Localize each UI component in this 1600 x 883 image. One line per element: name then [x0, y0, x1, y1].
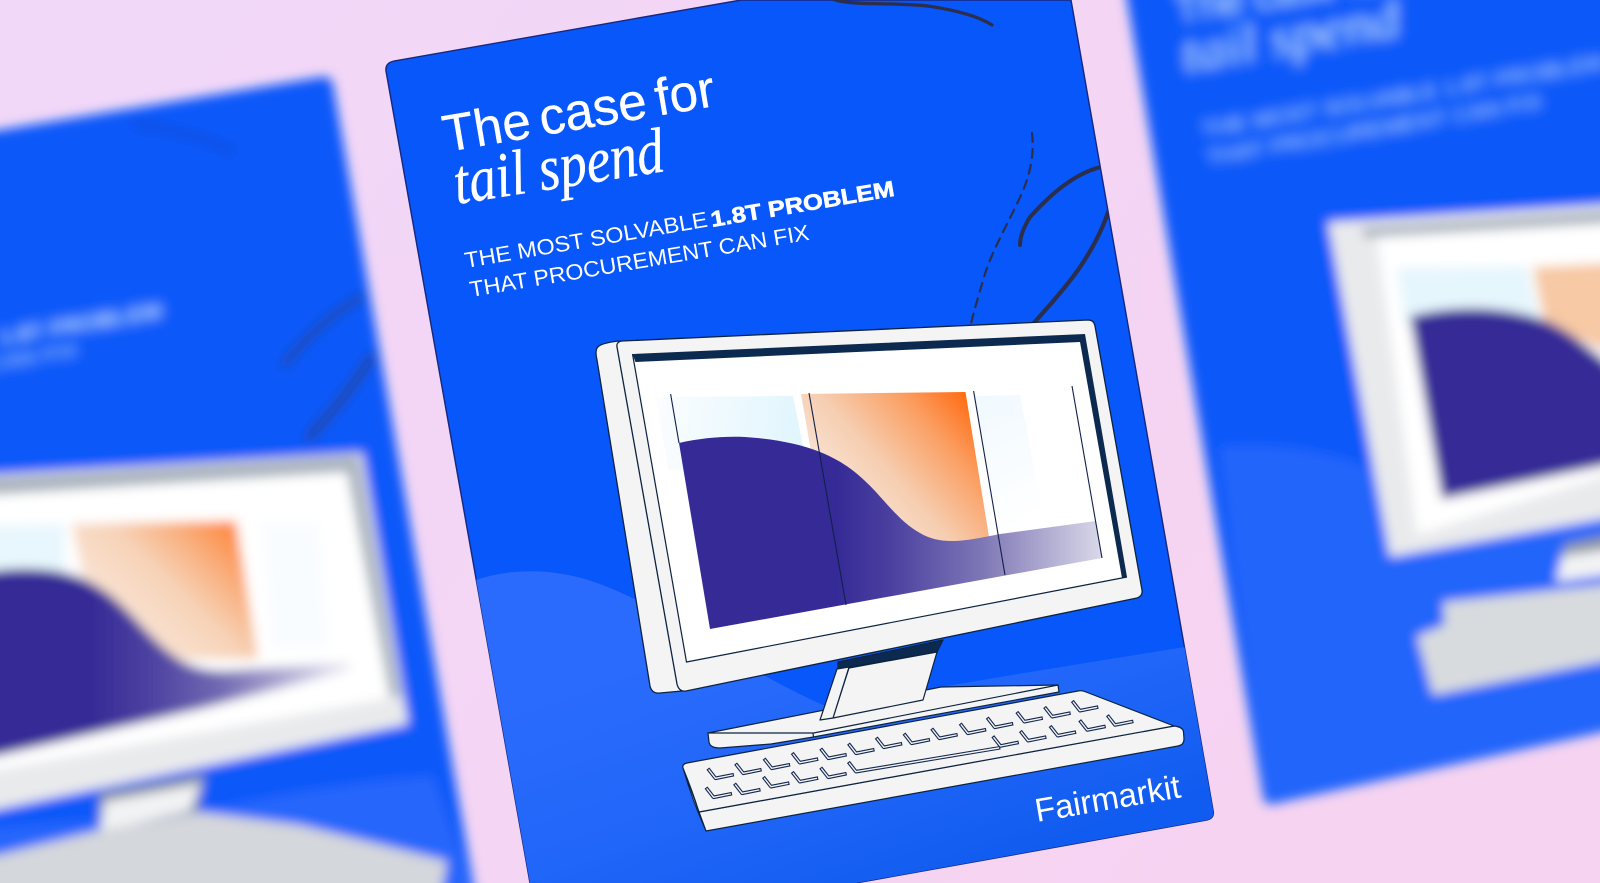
subtitle — [463, 176, 896, 302]
poster background — [386, 0, 1213, 883]
panel: blurred right poster: THE MOST SOLVABLE 1.8T PROBLEM — [1200, 52, 1600, 141]
subtitle: 1.8T PROBLEM — [709, 176, 896, 232]
decorative sketch lines — [833, 0, 1112, 324]
subtitle: THAT PROCUREMENT CAN FIX — [468, 220, 811, 302]
panel: blurred left poster — [0, 77, 476, 883]
chart — [656, 386, 1102, 629]
monitor — [596, 320, 1142, 693]
monitor base — [708, 685, 1059, 748]
monitor stand — [820, 640, 943, 720]
panel: main poster — [386, 0, 1230, 883]
keyboard — [683, 691, 1184, 831]
subtitle: THE MOST SOLVABLE — [463, 207, 709, 273]
logo: Fairmarkit: Fairmarkit — [1032, 768, 1183, 829]
title: The case for — [438, 60, 719, 164]
screen — [635, 340, 1124, 662]
panel: blurred right poster: THAT PROCUREMENT CAN FIX — [1205, 91, 1544, 169]
keyboard keys — [707, 702, 1132, 797]
title — [438, 60, 719, 218]
lighter wave — [470, 571, 1230, 883]
panel: blurred left poster: 1.8T PROBLEM — [0, 301, 164, 349]
title: tail spend — [448, 114, 669, 218]
panel: blurred right poster — [1122, 0, 1600, 804]
monitor frame — [596, 320, 1142, 693]
